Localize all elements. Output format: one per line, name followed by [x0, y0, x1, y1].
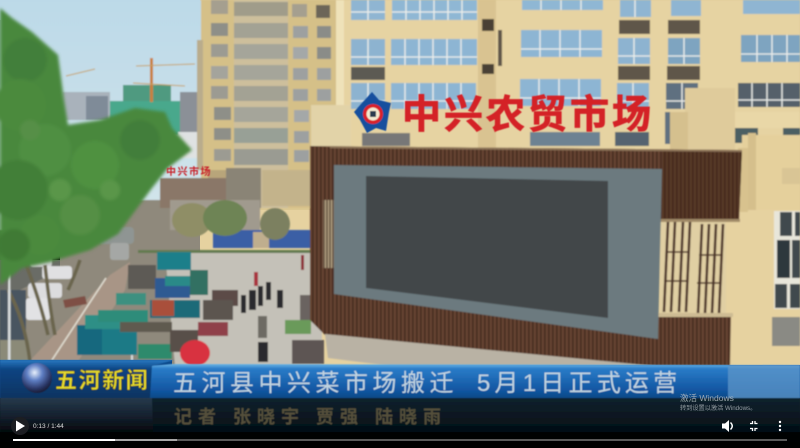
black bottom strip [0, 432, 800, 448]
video player controls [0, 393, 800, 448]
Windows activation watermark [680, 393, 756, 412]
banner backing [0, 360, 172, 400]
road and plaza ground [0, 200, 322, 366]
LED screen outer frame [334, 165, 662, 339]
left dark box [0, 398, 153, 432]
reporter credits: 记者 [174, 407, 222, 427]
store sign [354, 92, 654, 137]
main cream building [311, 0, 800, 170]
slatted window bay [655, 219, 740, 317]
trunk and pole details [8, 260, 133, 362]
small red sign: 中兴市场 [166, 165, 212, 178]
blue headline bar [150, 364, 800, 398]
logo bar [0, 360, 174, 398]
street-side houses [138, 168, 320, 253]
sign text: 中兴农贸市场 [402, 94, 654, 137]
Windows activation watermark: 转到设置以激活 Windows。 [680, 404, 756, 412]
window mullions [351, 0, 800, 109]
headline date text: 5月1日正式运营 [477, 370, 681, 397]
headline text: 五河县中兴菜市场搬迁 [173, 370, 458, 397]
mid-rise apartment building [197, 0, 337, 208]
globe icon [22, 363, 52, 393]
program name: 五河新闻 [55, 368, 149, 393]
news lower-third banner [0, 360, 800, 448]
right side windows [772, 211, 800, 346]
progress bar [13, 439, 787, 441]
exit fullscreen icon [750, 421, 758, 431]
teal tricycle trucks and motorbikes [77, 252, 324, 364]
sign logo [354, 92, 391, 133]
volume icon [722, 420, 732, 432]
reporter names: 张晓宇 贾强 陆晓雨 [233, 407, 447, 427]
sky [0, 0, 210, 230]
time label: 0:13 / 1:44 [33, 423, 64, 430]
pedestrians [241, 255, 304, 362]
trees [0, 8, 192, 285]
Windows activation watermark: 激活 Windows [680, 393, 734, 403]
dark caption bar [0, 398, 800, 448]
projecting pilaster block [670, 88, 800, 367]
brown slatted facade [310, 146, 742, 367]
play button [11, 417, 29, 435]
LED screen dark panel [366, 176, 608, 318]
more menu icon [779, 421, 781, 431]
parked cars [0, 227, 134, 364]
distant buildings and cranes [62, 58, 200, 158]
red balloon [180, 340, 210, 366]
